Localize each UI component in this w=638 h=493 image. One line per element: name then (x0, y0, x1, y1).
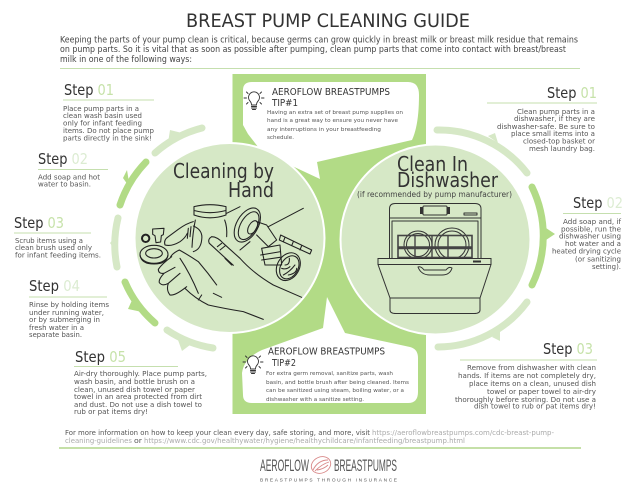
tip 2 text (266, 346, 409, 403)
illustration: dishwasher (378, 204, 491, 314)
tip 1 text: Having an extra set of breast pump supplies on (267, 110, 404, 116)
tip 2 text: TIP#2 (271, 358, 296, 369)
icon: lightbulb tip 2 (243, 356, 263, 374)
left step 02: Add soap and hot (38, 174, 100, 182)
left step 04: under running water, (29, 309, 104, 317)
footer text: https://aeroflowbreastpumps.com/cdc-breast-pump- (372, 428, 554, 437)
heading: clean in dishwasher (357, 152, 512, 199)
left step 05 (74, 348, 207, 416)
left step 04: or by submerging in (29, 316, 100, 324)
panel: tip 1 white bubble (243, 82, 419, 179)
icon: lightbulb tip 1 (244, 92, 264, 110)
left step 01: Place pump parts in a (63, 105, 139, 113)
left step 03 (14, 214, 101, 260)
left step 05: clean, unused dish towel or paper (74, 386, 195, 394)
logo: AEROFLOW (260, 456, 309, 475)
intro text: milk in one of the following ways: (60, 55, 192, 65)
right step 02: heated drying cycle (552, 248, 621, 256)
intro text (60, 36, 578, 65)
right step 03: dish towel to rub or pat items dry! (474, 402, 596, 410)
left step 03: clean brush used only (15, 244, 92, 252)
right step 02: possible, run the (561, 226, 621, 234)
right step 01: mesh laundry bag. (529, 145, 595, 153)
right step 01: Clean pump parts in a (517, 108, 595, 116)
panel: central green background (232, 74, 426, 414)
title: BREAST PUMP CLEANING GUIDE (186, 11, 470, 32)
right step 01: Step 01 (547, 84, 597, 102)
right step 03: hands. If items are not completely dry, (458, 372, 596, 380)
text: BREASTPUMPS (334, 456, 397, 475)
right step 02 (552, 194, 623, 271)
right step 01: place small items into a (511, 130, 595, 138)
right step 03: Remove from dishwasher with clean (467, 364, 596, 372)
heading: clean in dishwasher: (if recommended by pump manufacturer) (357, 190, 512, 199)
left step 01 (63, 81, 155, 142)
right step 01: dishwasher, if they are (514, 115, 595, 123)
heading: cleaning by hand: Hand (228, 178, 274, 202)
right step 02: Add soap and, if (563, 218, 622, 226)
tip 2 text: dishwasher with a sanitize setting. (266, 397, 364, 403)
tip 2 text: AEROFLOW BREASTPUMPS (268, 346, 385, 358)
left step 04 (29, 277, 109, 339)
footer text: or (134, 436, 142, 445)
tip 2 text: For extra germ removal, sanitize parts, wash (266, 371, 394, 377)
left step 05: wash basin, and bottle brush on a (74, 378, 195, 386)
right step 03: Step 03 (543, 340, 593, 358)
panel: tip 2 white bubble (242, 297, 418, 403)
tip 2 text: basin, and bottle brush after being cleaned. Items (266, 380, 409, 386)
right step 03: place items on a clean, unused dish (469, 380, 596, 388)
left step 02 (38, 150, 108, 188)
left step 04: Rinse by holding items (29, 301, 109, 309)
left step 04: separate basin. (29, 331, 82, 339)
left step 01: only for infant feeding (63, 120, 142, 128)
right step 02: setting). (592, 263, 621, 271)
left step 05: Step 05 (75, 348, 126, 366)
left step 02: Step 02 (38, 150, 88, 168)
heading: cleaning by hand (173, 159, 274, 202)
left step 01: items. Do not place pump (63, 127, 155, 135)
right step 02: hot water and a (565, 240, 621, 248)
left step 01: Step 01 (64, 81, 114, 99)
arcs: hand washing step ring (110, 128, 213, 351)
right step 03: towel or paper towel to air-dry (487, 388, 596, 396)
left step 04: fresh water in a (29, 324, 84, 332)
left step 05: towel in an area protected from dirt (74, 393, 202, 401)
right step 02: Step 02 (573, 194, 623, 212)
heading: clean in dishwasher: Clean In (397, 152, 468, 176)
arcs: dishwasher step ring (437, 130, 555, 347)
left step 01: clean wash basin used (63, 112, 142, 120)
right step 01: dishwasher-safe. Be sure to (497, 123, 595, 131)
heading: clean in dishwasher: Dishwasher (397, 168, 498, 192)
right step 02: (or sanitizing (575, 256, 621, 264)
illustration: hands holding pump parts (140, 203, 312, 319)
tip 1 text: schedule. (267, 135, 294, 141)
tip 1 text: any interruptions in your breastfeeding (267, 127, 381, 133)
intro text: on pump parts. So it is vital that as soon as possible after pumping, clean pump parts that come into contact with breast/breast (60, 45, 567, 55)
left step 03: Scrub items using a (15, 237, 83, 245)
right step 02: dishwasher using (559, 232, 621, 240)
tip 1 text: TIP#1 (271, 98, 298, 109)
footer text: cleaning-guidelines (65, 436, 132, 445)
footer text (65, 428, 554, 445)
left step 04: Step 04 (29, 277, 80, 295)
right step 01 (487, 84, 597, 153)
footer text: For more information on how to keep your clean every day, safe storing, and more, visit (65, 428, 370, 437)
heading: cleaning by hand: Cleaning by (173, 159, 274, 183)
left step 02: water to basin. (38, 180, 91, 188)
logo (260, 454, 397, 484)
panel: cleaning by hand circle (134, 143, 324, 333)
tip 1 text: hand is a great way to ensure you never have (267, 118, 399, 124)
intro text: Keeping the parts of your pump clean is critical, because germs can grow quickly in breast milk or breast milk residue that remains (60, 36, 578, 46)
panel: clean in dishwasher circle (340, 144, 530, 334)
right step 03: thoroughly before storing. Do not use a (455, 396, 596, 404)
left step 03: for infant feeding items. (15, 252, 101, 260)
right step 03 (455, 340, 597, 410)
tip 1 text (267, 87, 404, 141)
right step 01: closed-top basket or (523, 138, 595, 146)
left step 01: parts directly in the sink! (63, 134, 152, 142)
left step 05: Air-dry thoroughly. Place pump parts, (74, 370, 207, 378)
left step 03: Step 03 (14, 214, 64, 232)
logo: BREASTPUMPS THROUGH INSURANCE (260, 478, 397, 484)
left step 05: and dust. Do not use a dish towel to (74, 401, 202, 409)
left step 05: rub or pat items dry! (74, 408, 148, 416)
tip 2 text: can be sanitized using steam, boiling water, or a (266, 388, 404, 394)
footer text: https://www.cdc.gov/healthywater/hygiene/healthychildcare/infantfeeding/breastpump.html (144, 436, 465, 445)
tip 1 text: AEROFLOW BREASTPUMPS (272, 87, 390, 98)
